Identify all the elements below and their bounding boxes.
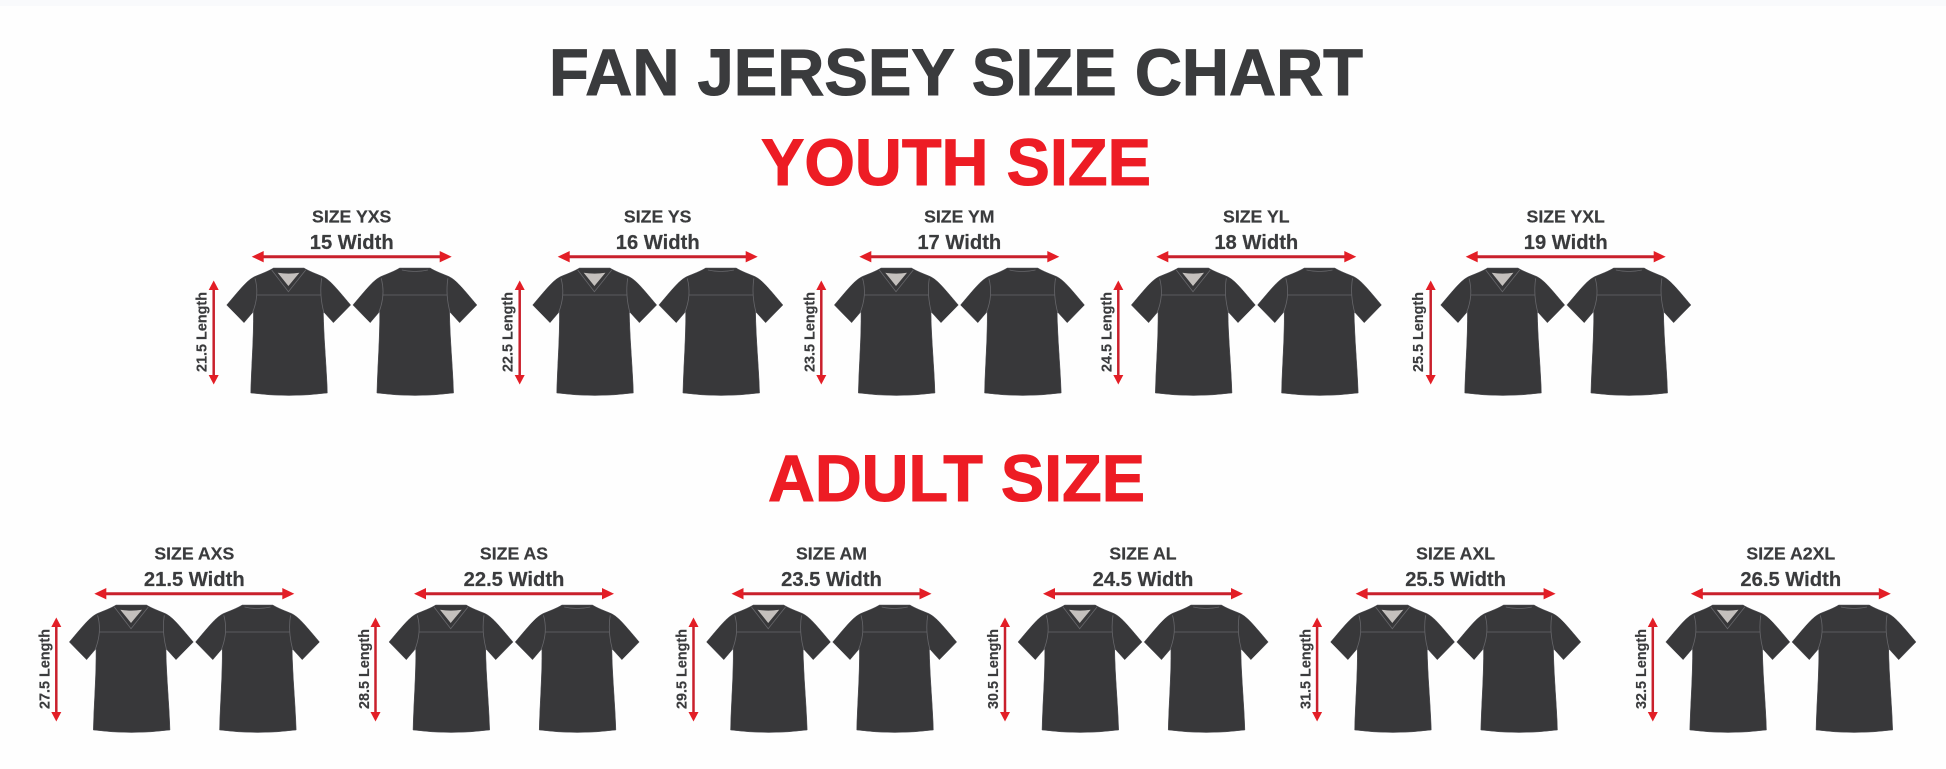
size label: SIZE AXL	[1416, 544, 1495, 564]
length label: 28.5 Length	[357, 629, 373, 709]
icon: jersey back	[1792, 605, 1916, 732]
panel: size AS	[357, 544, 639, 732]
icon: jersey front	[1018, 605, 1142, 732]
icon: jersey front	[227, 268, 351, 396]
panel: size AM	[674, 544, 957, 732]
panel: size YXL	[1411, 207, 1691, 396]
size label: SIZE AXS	[154, 544, 234, 564]
width label: 16 Width	[616, 232, 700, 254]
icon: jersey front	[1331, 605, 1455, 732]
length label: 24.5 Length	[1099, 292, 1115, 372]
panel: size AXL	[1299, 544, 1581, 732]
length label: 32.5 Length	[1634, 629, 1650, 709]
size label: SIZE YM	[924, 207, 995, 227]
arrow: length	[1113, 280, 1123, 384]
icon: jersey back	[833, 605, 957, 732]
arrow: width	[558, 251, 758, 262]
width label: 24.5 Width	[1093, 569, 1193, 591]
size label: SIZE AS	[480, 544, 548, 564]
arrow: length	[816, 280, 826, 384]
icon: jersey front	[69, 605, 193, 732]
icon: jersey front	[834, 268, 958, 396]
width label: 19 Width	[1524, 232, 1608, 254]
arrow: length	[51, 618, 61, 722]
panel: size YM	[802, 207, 1084, 396]
title: FAN JERSEY SIZE CHART	[549, 35, 1363, 109]
width label: 26.5 Width	[1740, 569, 1841, 591]
icon: jersey back	[960, 268, 1084, 396]
size label: SIZE YL	[1223, 207, 1290, 227]
panel: size YS	[501, 207, 783, 396]
panel: size YL	[1099, 207, 1382, 396]
panel: size YXS	[195, 207, 477, 396]
icon: jersey back	[1258, 268, 1382, 396]
icon: jersey front	[1131, 268, 1255, 396]
width label: 22.5 Width	[464, 569, 564, 591]
icon: jersey back	[1144, 605, 1268, 732]
arrow: length	[688, 618, 698, 722]
length label: 25.5 Length	[1411, 292, 1427, 372]
icon: jersey back	[353, 268, 477, 396]
arrow: length	[1648, 618, 1658, 722]
width label: 23.5 Width	[781, 569, 882, 591]
arrow: width	[1356, 588, 1556, 599]
icon: jersey back	[659, 268, 783, 396]
icon: jersey front	[389, 605, 513, 732]
width label: 15 Width	[310, 232, 394, 254]
arrow: length	[209, 280, 219, 384]
arrow: width	[252, 251, 452, 262]
size label: SIZE AL	[1109, 544, 1177, 564]
icon: jersey back	[515, 605, 639, 732]
arrow: width	[859, 251, 1059, 262]
length label: 22.5 Length	[501, 292, 517, 372]
icon: jersey front	[706, 605, 830, 732]
length label: 27.5 Length	[37, 629, 53, 709]
size label: SIZE YXS	[312, 207, 392, 227]
arrow: width	[94, 588, 294, 599]
arrow: length	[1312, 618, 1322, 722]
length label: 23.5 Length	[802, 292, 818, 372]
arrow: length	[370, 618, 380, 722]
length label: 29.5 Length	[674, 629, 690, 709]
arrow: width	[1156, 251, 1356, 262]
arrow: width	[414, 588, 614, 599]
arrow: width	[732, 588, 932, 599]
length label: 30.5 Length	[986, 629, 1002, 709]
icon: jersey back	[1567, 268, 1691, 396]
arrow: width	[1043, 588, 1243, 599]
heading: youth size: YOUTH SIZE	[761, 125, 1151, 199]
heading: adult size: ADULT SIZE	[768, 441, 1145, 515]
panel: size AXS	[37, 544, 320, 732]
length label: 21.5 Length	[195, 292, 211, 372]
icon: jersey front	[533, 268, 657, 396]
size label: SIZE YS	[624, 207, 692, 227]
arrow: length	[1000, 618, 1010, 722]
icon: jersey front	[1666, 605, 1790, 732]
icon: jersey back	[196, 605, 320, 732]
length label: 31.5 Length	[1299, 629, 1315, 709]
width label: 17 Width	[917, 232, 1001, 254]
arrow: length	[515, 280, 525, 384]
size label: SIZE YXL	[1527, 207, 1605, 227]
icon: jersey front	[1441, 268, 1565, 396]
width label: 21.5 Width	[144, 569, 245, 591]
panel: size A2XL	[1634, 544, 1916, 732]
arrow: width	[1466, 251, 1666, 262]
arrow: width	[1691, 588, 1891, 599]
panel: size AL	[986, 544, 1268, 732]
width label: 25.5 Width	[1405, 569, 1506, 591]
size label: SIZE AM	[796, 544, 867, 564]
arrow: length	[1426, 280, 1436, 384]
size label: SIZE A2XL	[1746, 544, 1835, 564]
icon: jersey back	[1457, 605, 1581, 732]
width label: 18 Width	[1214, 232, 1298, 254]
